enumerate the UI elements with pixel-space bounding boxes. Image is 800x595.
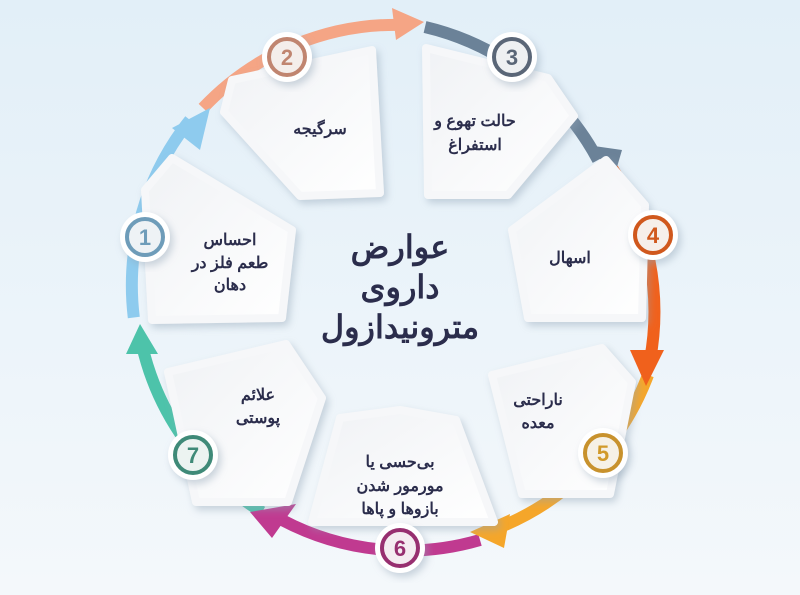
arrow: segment 2 (203, 25, 405, 108)
badge 4 (628, 210, 678, 260)
badge 3: 3 (506, 45, 518, 70)
badge 2 (262, 32, 312, 82)
text: card 1: طعم فلز در (191, 255, 268, 273)
text: card 4: اسهال (549, 250, 591, 268)
badge 2: 2 (281, 45, 293, 70)
title: داروی (360, 269, 440, 307)
arrow: segment 6 (282, 520, 480, 551)
text: card 5 (513, 392, 563, 432)
text: card 7: علائم (241, 387, 275, 405)
badge 6 (375, 523, 425, 573)
badge 4: 4 (647, 223, 660, 248)
text: card 2: سرگیجه (293, 119, 347, 139)
text: card 6: مورمور شدن (356, 478, 444, 496)
badge 7: 7 (187, 443, 199, 468)
text: card 5: معده (521, 415, 555, 432)
card 6 (312, 410, 494, 522)
text: card 5: ناراحتی (513, 392, 563, 410)
badge 3 (487, 32, 537, 82)
card 2 (224, 50, 380, 196)
badge 1: 1 (139, 225, 151, 250)
arrow: segment 4 (612, 168, 654, 360)
badge 5 (578, 428, 628, 478)
card 7 (168, 344, 322, 502)
text: card 3: استفراغ (448, 137, 502, 155)
text: card 3 (433, 113, 516, 155)
ring arrows (132, 25, 654, 551)
text: card 3: حالت تهوع و (433, 113, 516, 131)
text: card 1 (191, 232, 268, 294)
text: card 7: پوستی (236, 410, 281, 428)
title (321, 229, 479, 347)
card 5 (492, 348, 632, 494)
arrow: segment 1 (132, 120, 190, 318)
badge 6: 6 (394, 536, 406, 561)
text: card 1: احساس (203, 232, 257, 250)
badge 5: 5 (597, 441, 609, 466)
arrow: segment 7 (142, 345, 262, 512)
text: card 1: دهان (214, 277, 246, 294)
card 4 (512, 160, 645, 318)
text: card 6: بازوها و پاها (361, 501, 439, 519)
text: card 6: بی‌حسی یا (365, 454, 435, 471)
title: مترونیدازول (321, 309, 479, 347)
arrow: segment 5 (498, 375, 648, 528)
title: عوارض (351, 229, 449, 267)
badge 7 (168, 430, 218, 480)
arrow: segment 3 (425, 27, 598, 160)
arrowheads (126, 8, 664, 548)
card 3 (426, 48, 574, 195)
badge 1 (120, 212, 170, 262)
text: card 7 (236, 387, 281, 428)
card 1 (145, 158, 292, 320)
text: card 6 (356, 454, 444, 519)
